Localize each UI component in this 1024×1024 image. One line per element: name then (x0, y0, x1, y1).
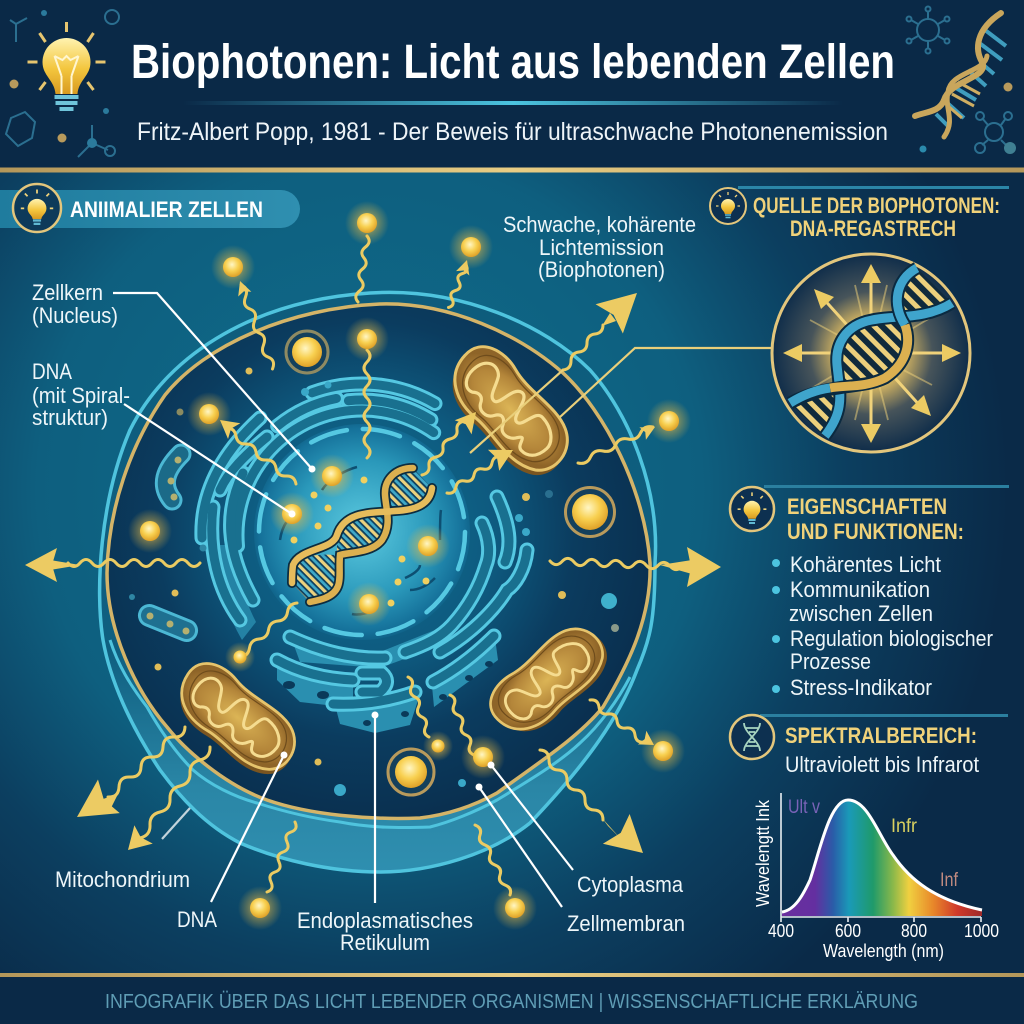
label: dna spiral: (mit Spiral- (32, 383, 130, 408)
spectrum chart (753, 793, 999, 961)
bullet list: Regulation biologischer (790, 626, 993, 651)
cell membrane outer (100, 292, 656, 872)
photon waves (68, 236, 682, 895)
heading: SPEKTRALBEREICH: (785, 723, 977, 748)
decorative molecules left (6, 10, 119, 157)
label: endoplasmic reticulum: Retikulum (340, 930, 430, 955)
heading (753, 193, 1000, 241)
spectrum chart: 800 (901, 921, 927, 941)
nucleus inner arcs (280, 467, 441, 615)
cell inner membrane line (110, 640, 630, 827)
nuclear envelope dashes (259, 429, 465, 635)
spectrum chart: 1000 (964, 921, 999, 941)
label: nucleus: (Nucleus) (32, 303, 118, 328)
heading: EIGENSCHAFTEN (787, 494, 947, 519)
label: biophotons: (Biophotonen) (538, 257, 665, 282)
bullet list: Kommunikation (790, 577, 930, 602)
panel: source of biophotons (710, 186, 1009, 452)
header band (0, 0, 1024, 170)
dna detail circle (772, 254, 970, 452)
label: dna: DNA (177, 907, 217, 932)
title: Biophotonen: Licht aus lebenden Zellen (131, 36, 895, 89)
heading: UND FUNKTIONEN: (787, 519, 964, 544)
mitochondrion top (435, 336, 584, 488)
panel: spectral range (730, 714, 1008, 961)
bullet list: Prozesse (790, 649, 871, 674)
label: nucleus: Zellkern (32, 280, 103, 305)
label: biophotons: Schwache, kohärente (503, 212, 696, 237)
footer: INFOGRAFIK ÜBER DAS LICHT LEBENDER ORGANISMEN | WISSENSCHAFTLICHE ERKLÄRUNG (105, 991, 918, 1013)
gold divider (0, 168, 1024, 172)
pill heading: animal cell (0, 184, 300, 232)
nucleus (254, 424, 470, 640)
spectrum chart: Ult v (788, 797, 820, 818)
label leader lines (113, 293, 573, 907)
mitochondrion lower right (481, 614, 619, 747)
heading (787, 494, 964, 544)
spectrum chart: Wavelengtt Ink (753, 799, 773, 907)
leader line: gold to dna detail (560, 348, 772, 417)
label: dna spiral: struktur) (32, 405, 108, 430)
label: biophotons: Lichtemission (539, 235, 664, 260)
footer (0, 973, 1024, 1024)
bullet list: Kohärentes Licht (790, 552, 941, 577)
subheading: Ultraviolett bis Infrarot (785, 752, 979, 777)
label: dna spiral (32, 359, 130, 430)
icon: dna badge (730, 715, 774, 759)
icon: light bulb (28, 22, 106, 109)
bullet list: zwischen Zellen (789, 601, 933, 626)
icon: bulb badge (710, 188, 746, 224)
label: cell membrane: Zellmembran (567, 911, 685, 936)
subtitle: Fritz-Albert Popp, 1981 - Der Beweis für ultraschwache Photonenemission (137, 118, 888, 146)
bullet list: Stress-Indikator (790, 675, 932, 700)
cell diagram (25, 201, 772, 930)
dna helix in nucleus (292, 468, 432, 602)
cytoplasm with gold outline (107, 304, 650, 818)
heading: DNA-REGASTRECH (790, 216, 956, 241)
panel: properties and functions (730, 485, 1009, 700)
spectrum chart: Infr (891, 816, 918, 837)
decorative molecules right (906, 6, 1016, 154)
endoplasmic reticulum blocks (212, 545, 498, 733)
label: endoplasmic reticulum (297, 908, 473, 955)
label: biophotons (503, 212, 696, 282)
pill heading: animal cell: ANIIMALIER ZELLEN (70, 197, 263, 222)
label: mitochondrium: Mitochondrium (55, 867, 190, 892)
label: nucleus (32, 280, 118, 328)
label: cytoplasm: Cytoplasma (577, 872, 684, 897)
icon: bulb badge (730, 487, 774, 531)
icon: dna helix top right (915, 13, 1006, 137)
bullet list (772, 552, 993, 700)
photons (128, 201, 691, 930)
leader line: gold to nucleus emission (470, 370, 563, 453)
spectrum chart: 400 (768, 921, 794, 941)
spectrum chart: Inf (940, 870, 959, 891)
photon arrowheads (25, 258, 721, 868)
spectrum chart: Wavelength (nm) (823, 941, 944, 961)
label: endoplasmic reticulum: Endoplasmatisches (297, 908, 473, 933)
organelles: small capsules and vesicles (129, 331, 619, 796)
label: dna spiral: DNA (32, 359, 72, 384)
spectrum chart: 600 (835, 921, 861, 941)
mitochondrion lower left (164, 653, 310, 787)
endoplasmic reticulum arcs (174, 342, 550, 718)
